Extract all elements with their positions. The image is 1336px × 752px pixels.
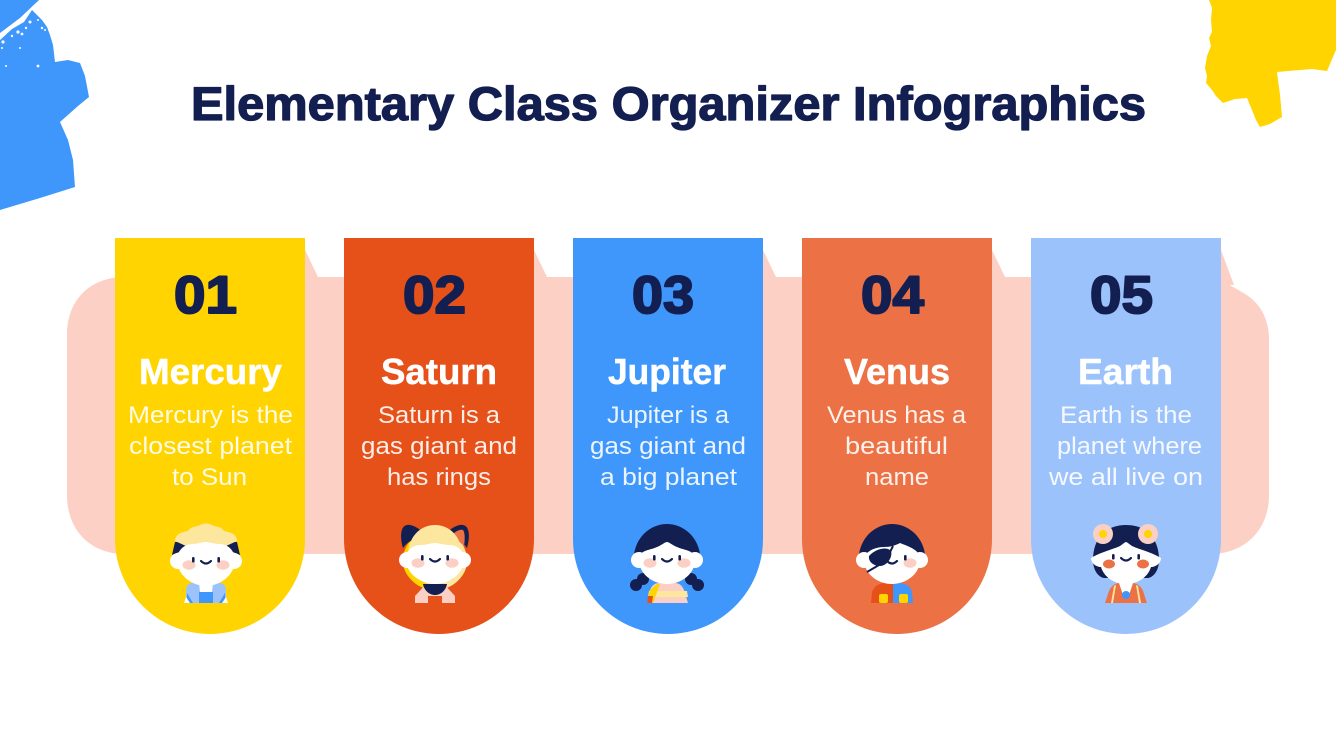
description bbox=[361, 402, 517, 491]
peach background band bbox=[67, 277, 1269, 554]
icon: child with flowers in hair bbox=[1091, 524, 1161, 603]
description: closest planet bbox=[129, 433, 292, 460]
description: a big planet bbox=[600, 464, 737, 491]
description: Earth is the bbox=[1060, 402, 1192, 429]
panel: Earth bbox=[1031, 238, 1221, 634]
card shape bbox=[344, 238, 534, 634]
description: Jupiter is a bbox=[607, 402, 730, 429]
heading: Saturn bbox=[381, 351, 497, 392]
icon: child with pigtails bbox=[630, 524, 704, 603]
description: Venus has a bbox=[827, 402, 967, 429]
icon: child with cat ears bbox=[399, 525, 471, 603]
card shape bbox=[573, 238, 763, 634]
heading: Jupiter bbox=[608, 351, 726, 392]
description bbox=[590, 402, 746, 491]
tab folds bbox=[305, 250, 1234, 285]
heading: Mercury bbox=[139, 351, 282, 392]
number: 02 bbox=[403, 266, 466, 325]
description: we all live on bbox=[1048, 464, 1203, 491]
description: Saturn is a bbox=[378, 402, 501, 429]
heading: Venus bbox=[844, 351, 950, 392]
title: Elementary Class Organizer Infographics bbox=[191, 77, 1146, 130]
panel: Saturn bbox=[344, 238, 534, 634]
panel: Venus bbox=[802, 238, 992, 634]
description: gas giant and bbox=[361, 433, 517, 460]
description bbox=[128, 402, 293, 491]
brush stroke: blue top left bbox=[0, 0, 89, 210]
description: has rings bbox=[387, 464, 491, 491]
description bbox=[827, 402, 967, 491]
number: 03 bbox=[632, 266, 694, 325]
description: planet where bbox=[1057, 433, 1202, 460]
description: name bbox=[865, 464, 929, 491]
card shape bbox=[802, 238, 992, 634]
icon: pirate child with eye patch bbox=[856, 524, 928, 603]
panel: Jupiter bbox=[573, 238, 763, 634]
number: 04 bbox=[861, 266, 925, 325]
card shape bbox=[1031, 238, 1221, 634]
number: 01 bbox=[174, 266, 237, 325]
description bbox=[1048, 402, 1203, 491]
description: Mercury is the bbox=[128, 402, 293, 429]
panel: Mercury bbox=[115, 238, 305, 634]
description: beautiful bbox=[845, 433, 948, 460]
description: gas giant and bbox=[590, 433, 746, 460]
number: 05 bbox=[1090, 266, 1153, 325]
icon: child with curly blond hair bbox=[170, 524, 242, 603]
description: to Sun bbox=[172, 464, 247, 491]
heading: Earth bbox=[1078, 351, 1173, 392]
card shape bbox=[115, 238, 305, 634]
brush stroke: yellow top right bbox=[1205, 0, 1336, 127]
